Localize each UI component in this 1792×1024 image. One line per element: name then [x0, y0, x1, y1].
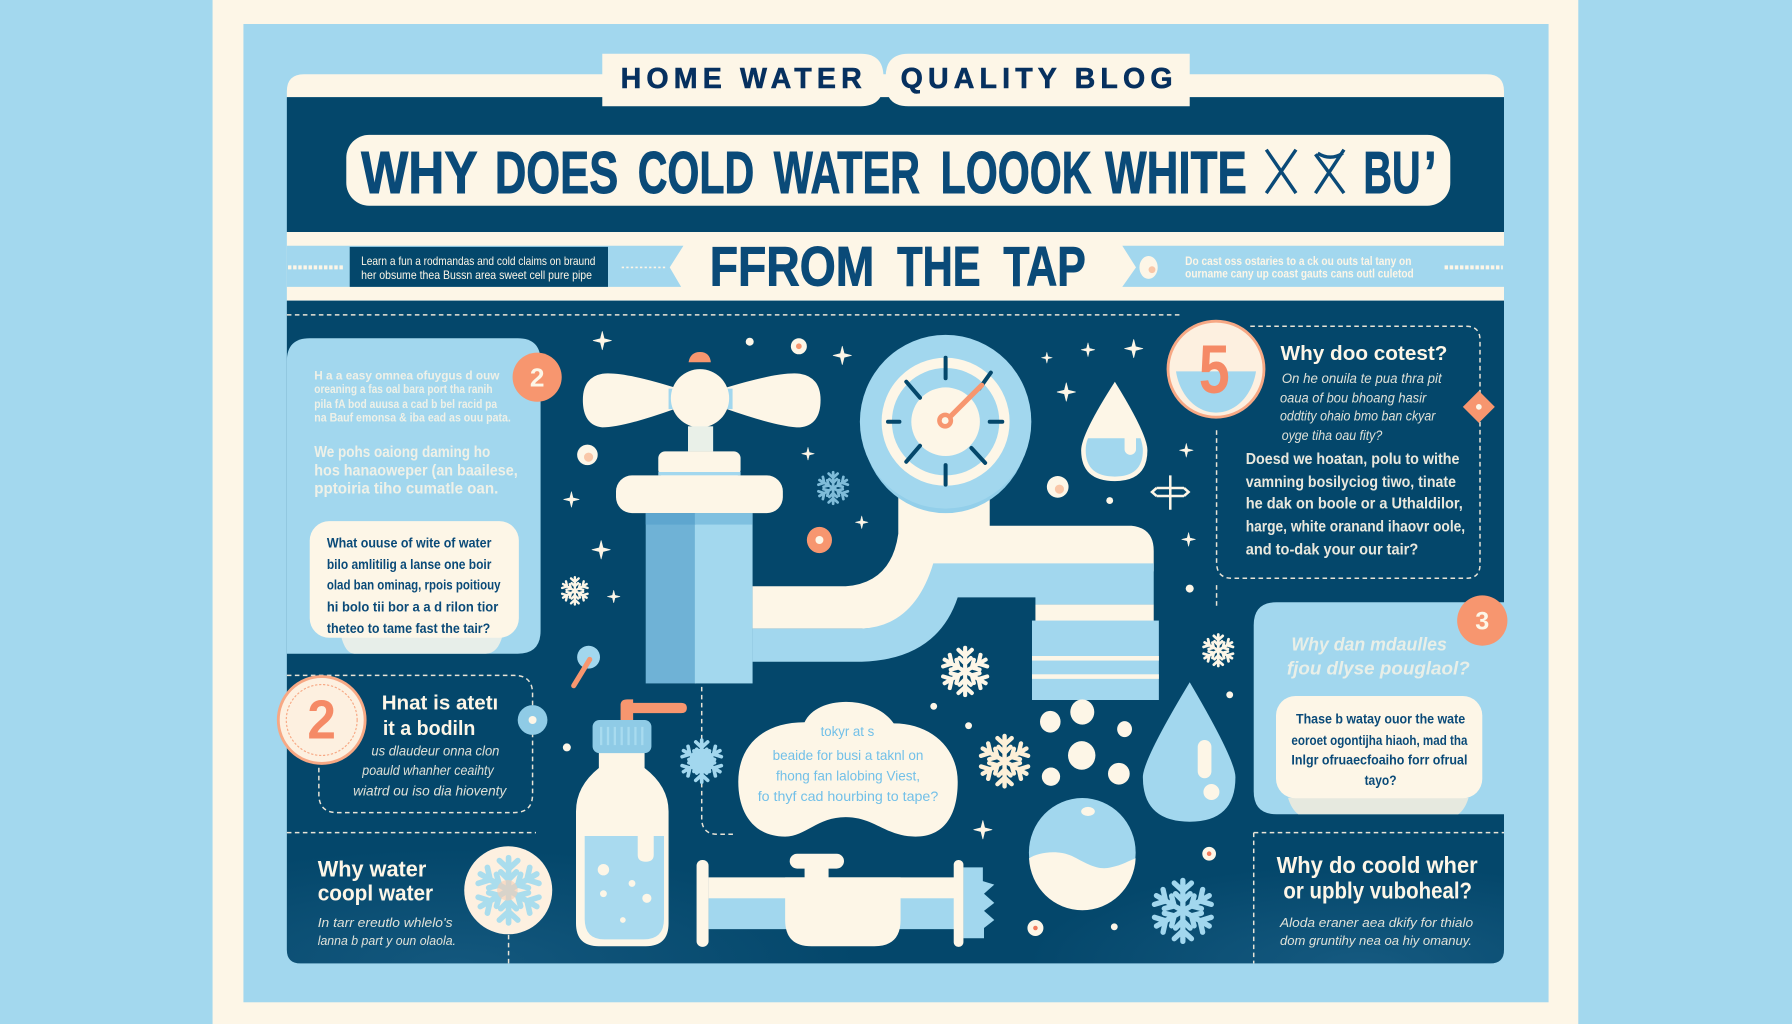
- callout: inner question: theteo to tame fast the tair?: [327, 621, 490, 637]
- text lines: us dlaudeur onna clon: [371, 743, 499, 758]
- icon: node: [518, 705, 547, 735]
- illustration: faucet: [583, 352, 1159, 700]
- heading: fjou dlyse pouglaol?: [1287, 657, 1470, 678]
- text block: intro: pila fA bod auusa a cad b bel racid pa: [314, 397, 497, 411]
- stem: [688, 426, 713, 451]
- right ribbon: [1122, 246, 1504, 287]
- bold text: he dak on boole or a Uthaldilor,: [1246, 496, 1463, 513]
- navy main panel: [287, 301, 1504, 963]
- icon: blue splat: [681, 740, 723, 782]
- subtitle heading: [710, 235, 1086, 298]
- bold text: and to-dak your our tair?: [1246, 541, 1418, 558]
- illustration: pipe with valve: [697, 854, 994, 947]
- right ribbon: ourname cany up coast gauts cans outl culetod: [1185, 267, 1414, 281]
- panel: why do could bottom right: dom gruntihy nea oa hiy omanuy.: [1280, 933, 1472, 948]
- badge: number 2: [513, 353, 562, 402]
- callout: inner question: [310, 521, 519, 654]
- callout: inner answer: Thase b watay ouor the wate: [1296, 711, 1465, 726]
- callout: cloud question: tokyr at s: [821, 724, 874, 740]
- handle cap dome: [689, 352, 711, 362]
- panel: what is a boiling: [278, 675, 547, 813]
- tab: home water: [602, 54, 883, 106]
- title pill: WHY: [361, 139, 478, 206]
- connector dashed: [702, 687, 736, 834]
- text block: explanation: We pohs oaiong daming ho: [314, 444, 490, 461]
- heading: Hnat is atetı: [382, 692, 498, 715]
- panel: why water bottom left: In tarr ereutlo whlelo's: [318, 916, 453, 930]
- badge: number 3: 3: [1475, 608, 1489, 636]
- navy title band: [287, 97, 1504, 232]
- badge: number 2 large: 2: [307, 688, 336, 750]
- subtitle band: [287, 232, 1504, 301]
- subtitle heading: THE: [897, 235, 981, 298]
- panel: why water bottom left: [318, 846, 552, 963]
- text block: explanation: [314, 444, 518, 498]
- panel: why do could bottom right: [1254, 833, 1504, 963]
- bold text: vamning bosilyciog tiwo, tinate: [1246, 474, 1456, 491]
- heading: Why doo cotest?: [1281, 342, 1447, 365]
- left ribbon: Learn a fun a rodmandas and cold claims on braund: [361, 254, 595, 268]
- header strip: [287, 74, 1504, 97]
- badge: number 2: 2: [530, 362, 544, 392]
- faucet body: [646, 513, 696, 683]
- callout: inner answer: eoroet ogontijha hiaoh, mad tha: [1291, 733, 1468, 748]
- decorative dots: [563, 338, 1233, 936]
- badge: number 5: 5: [1199, 331, 1230, 408]
- callout: inner question: hi bolo tii bor a a d rilon tior: [327, 599, 499, 615]
- spout cream: [753, 496, 1154, 629]
- spout blue: [753, 563, 1154, 662]
- panel: why do could bottom right: Why do coold wher: [1277, 852, 1478, 878]
- right ribbon: Do cast oss ostaries to a ck ou outs tal tany on: [1185, 254, 1411, 268]
- text block: intro: H a a easy omnea ofuygus d ouw: [314, 368, 500, 382]
- text block: intro: [314, 368, 511, 425]
- title pill: BU: [1363, 139, 1421, 206]
- panel: why do could bottom right: or upbly vuboheal?: [1283, 877, 1472, 903]
- panel: right blue card: [1254, 595, 1507, 814]
- title pill: ’: [1424, 139, 1437, 206]
- callout: inner question: bilo amlitilig a lanse one boir: [327, 557, 492, 573]
- bold text: [1246, 451, 1465, 558]
- text block: intro: oreaning a fas oal bara port tha ranih: [314, 382, 493, 396]
- panel: why do cotest: [1168, 321, 1495, 606]
- title pill: WHITE: [1105, 139, 1247, 206]
- callout: inner question: What ouuse of wite of water: [327, 535, 492, 551]
- title pill: DOES: [495, 139, 618, 206]
- icon: large water drop: [1143, 682, 1235, 822]
- panel lower glow right: [1029, 823, 1504, 963]
- subtitle heading: FFROM: [710, 235, 874, 298]
- subtitle heading: TAP: [1003, 235, 1086, 298]
- inner blue field: [243, 24, 1549, 1002]
- text block: explanation: pptoiria tiho cumatle oan.: [314, 481, 498, 498]
- icon: diamond: [1463, 391, 1495, 423]
- panel: why do could bottom right: Aloda eraner aea dkify for thialo: [1279, 915, 1473, 930]
- icon: coral dot: [807, 527, 832, 553]
- tab: home water: HOME WATER: [621, 63, 862, 95]
- heading: it a bodiln: [383, 717, 475, 740]
- title pill: [346, 135, 1450, 206]
- icon: water globe: [1029, 798, 1136, 910]
- callout: cloud question: fhong fan lalobing Viest,: [776, 769, 920, 785]
- panel: why water bottom left: Why water: [318, 857, 427, 882]
- text block: intro: na Bauf emonsa & iba ead as ouu pata.: [314, 411, 511, 425]
- italic text: oaua of bou bhoang hasir: [1280, 390, 1428, 405]
- handle wings: [583, 373, 821, 427]
- title pill: LOOOK: [941, 139, 1091, 206]
- callout: inner answer: tayo?: [1365, 773, 1397, 788]
- heading: [1287, 633, 1470, 678]
- title pill: WATER: [774, 139, 920, 206]
- bold text: Doesd we hoatan, polu to withe: [1246, 451, 1460, 468]
- icon: water drop top: [1081, 382, 1147, 481]
- panel lower glow left: [287, 800, 858, 963]
- badge: number 3: [1457, 595, 1507, 646]
- tab: quality blog: [886, 54, 1190, 106]
- callout: inner question: olad ban ominag, rpois poitiouy: [327, 578, 501, 594]
- callout: cloud question: beaide for busi a taknl on: [773, 748, 923, 764]
- italic text: On he onuila te pua thra pit: [1282, 371, 1443, 386]
- panel: why water bottom left: coopl water: [318, 881, 433, 906]
- text lines: wiatrd ou iso dia hioventy: [353, 783, 507, 798]
- icon: bubbles: [1040, 699, 1132, 786]
- tab: quality blog: QUALITY BLOG: [901, 63, 1173, 95]
- heading: [382, 692, 498, 740]
- left ribbon: [287, 246, 683, 287]
- italic text: oddtity ohaio bmo ban ckyar: [1280, 409, 1437, 424]
- left ribbon: her obsume thea Bussn area sweet cell pure pipe: [361, 268, 592, 282]
- outlet: [1032, 621, 1159, 700]
- icon: pressure gauge: [860, 335, 1031, 513]
- icon: thermometer stick: [574, 646, 600, 686]
- panel: left blue card: [287, 338, 562, 654]
- italic text: [1280, 371, 1443, 443]
- text lines: [353, 743, 507, 798]
- heading: Why dan mdaulles: [1291, 633, 1447, 654]
- text block: explanation: hos hanaoweper (an baailese,: [314, 462, 518, 479]
- icon: snowflake medallion: [464, 846, 552, 934]
- decorative sparkles: [564, 331, 1195, 839]
- title pill: COLD: [638, 139, 754, 206]
- icon: snowflakes: [561, 472, 1234, 941]
- panel: why water bottom left: lanna b part y oun olaola.: [318, 934, 456, 948]
- callout: cloud question: [738, 702, 958, 837]
- text lines: poauld whanher ceaihty: [361, 763, 495, 778]
- bold text: harge, white oranand ihaovr oole,: [1246, 518, 1465, 535]
- italic text: oyge tiha oau fity?: [1282, 428, 1383, 443]
- badge: number 2 large: [278, 677, 365, 763]
- callout: cloud question: fo thyf cad hourbing to tape?: [758, 789, 938, 805]
- illustration: milky water bottle: [576, 699, 687, 946]
- badge: number 5: [1168, 321, 1264, 417]
- cream frame: [213, 0, 1578, 1024]
- callout: inner answer: Inlgr ofruaecfoaiho forr ofrual: [1291, 753, 1467, 768]
- callout: inner answer: [1276, 696, 1482, 814]
